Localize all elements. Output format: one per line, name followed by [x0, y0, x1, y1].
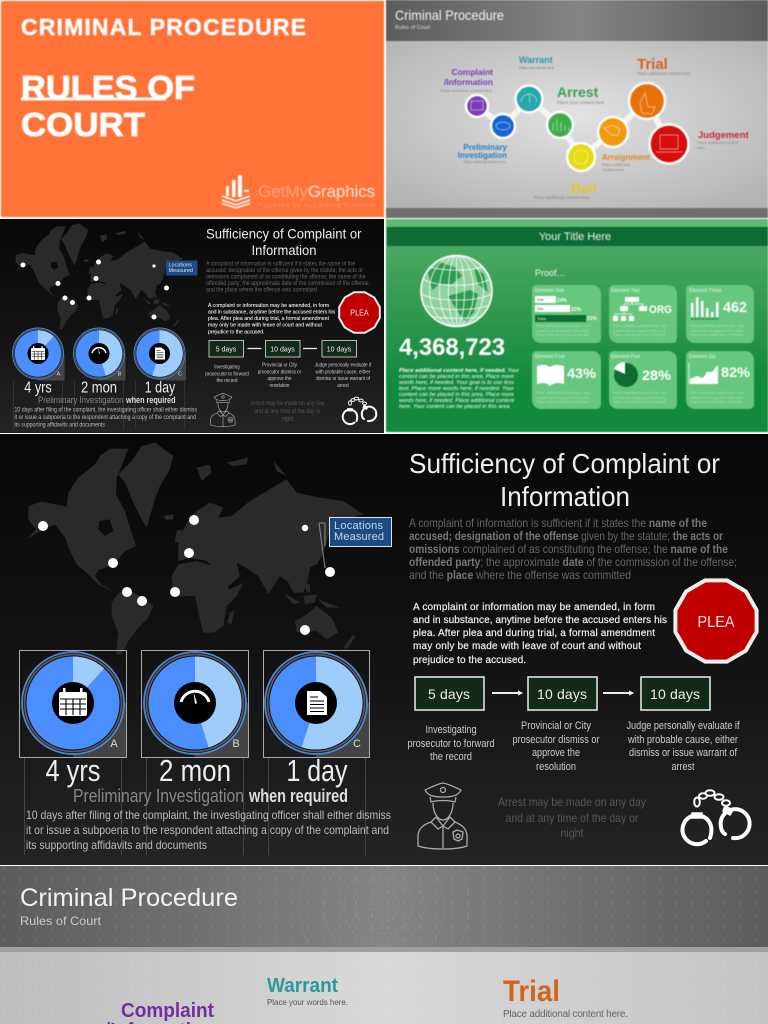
- card captions: Place additional content here. Your: [536, 324, 591, 328]
- label: warrant: [519, 55, 554, 70]
- thumbnail gray paragraph: A complaint of information is sufficient if it states the name of the: [206, 262, 356, 268]
- card: element six: [689, 354, 751, 384]
- subtitle: rules of court: Rules of Court: [20, 914, 102, 928]
- green paragraph: content can be placed in this area. Place more: [399, 392, 514, 398]
- thumbnail arrest note: and at any time of the day or: [254, 409, 321, 415]
- element cards backgrounds: [532, 285, 754, 409]
- label: bail: Place additional content here: [534, 195, 590, 200]
- card captions: content can be placed in this area.: [613, 396, 666, 400]
- callout: locations measured: Measured: [334, 531, 384, 543]
- card: element one: 22%: [571, 307, 582, 313]
- thumbnail captions: arrest: [337, 383, 349, 389]
- label: arrest: [557, 84, 605, 105]
- panel: sufficiency large: [0, 434, 768, 865]
- subheading: preliminary investigation: Preliminary Investigation: [73, 786, 244, 806]
- label: trial: [637, 56, 692, 76]
- thumbnail stats and text: when required: [125, 395, 176, 405]
- label: trial: Trial: [637, 56, 668, 73]
- note: arrest timing: Arrest may be made on any day: [498, 795, 646, 809]
- note: arrest timing: night: [560, 826, 584, 840]
- thumbnail captions: approve the: [268, 376, 292, 382]
- heading: sufficiency of complaint: Sufficiency of Complaint or: [409, 448, 720, 479]
- paragraph: sufficiency requirements: offended party; the approximate date of the commission of the offense;: [409, 555, 737, 569]
- timeline captions: arrest: [672, 761, 694, 773]
- card: element one: [535, 288, 598, 322]
- label: arraignment: Arraignment: [602, 153, 650, 162]
- callout: locations measured: [319, 518, 392, 568]
- thumbnail timeline: [209, 340, 356, 357]
- donut C: 1 day: [264, 650, 370, 758]
- timeline captions: prosecutor to forward: [408, 738, 494, 750]
- thumbnail stats and text: it or issue a subpoena to the respondent attaching a copy of the complaint and: [14, 415, 196, 421]
- timeline captions: approve the: [532, 747, 580, 759]
- city silhouette: [387, 396, 768, 432]
- card captions: Place more words here, if needed.: [536, 333, 589, 337]
- panel: orange cover: [1, 1, 384, 217]
- thumbnail handcuffs icon: [343, 397, 376, 424]
- logo: GetMyGraphics: GetMy: [258, 182, 308, 201]
- icon: handcuffs: [682, 790, 750, 844]
- card: element four: 43%: [567, 365, 597, 381]
- card captions: Place more words here, if needed.: [613, 333, 666, 337]
- thumbnail captions: [205, 362, 372, 389]
- thumbnail amendment paragraph: and in substance, anytime before the accused enters his: [208, 310, 336, 316]
- card: element one: 31%: [587, 316, 598, 322]
- thumbnail arrest note: [250, 401, 324, 422]
- thumbnail plea sign: [339, 292, 380, 333]
- timeline boxes: [415, 677, 710, 710]
- timeline captions: Investigating: [426, 724, 476, 736]
- paragraph: amendment: [413, 602, 667, 666]
- paragraph: sufficiency requirements: and the place where the offense was committed: [409, 568, 631, 582]
- heading: rules of court: COURT: [21, 106, 145, 143]
- label: judgement: Judgement: [698, 130, 750, 141]
- label: complaint information: /Information: [444, 77, 493, 87]
- timeline captions: [408, 720, 740, 773]
- thumbnail heading: [206, 226, 362, 258]
- card: element one: Two: [537, 307, 543, 311]
- paragraph: preliminary investigation: it or issue a subpoena to the respondent attaching a copy of the complaint and: [26, 823, 389, 837]
- label: arrest: Place your content here: [557, 100, 605, 105]
- icon: plea stop sign: [675, 580, 757, 662]
- thumbnail heading: Information: [252, 242, 316, 258]
- heading: rules of court: RULES OF: [21, 69, 195, 106]
- label: preliminary investigation: Place additional content here: [463, 160, 506, 164]
- timeline captions: the record: [430, 751, 472, 763]
- paragraph: sufficiency requirements: omissions complained of as constituting the offense; the name of the: [409, 542, 728, 556]
- card: element two: [611, 288, 672, 321]
- label: complaint information: Complaint: [121, 1000, 214, 1022]
- note: arrest timing: [498, 795, 646, 840]
- card: element six: 82%: [721, 364, 751, 380]
- green paragraph: content can be placed in this area. Place more: [399, 374, 514, 380]
- thumbnail world map: [15, 223, 183, 329]
- thumbnail gray paragraph: and the place where the offense was committed: [206, 288, 317, 294]
- thumbnail amendment paragraph: prejudice to the accused.: [208, 330, 264, 336]
- thumbnail amendment paragraph: may only be made with leave of court and without: [208, 322, 323, 328]
- timeline captions: resolution: [536, 761, 576, 773]
- card: element five: 28%: [642, 367, 672, 383]
- card captions: content can be placed in this area.: [536, 396, 589, 400]
- heading: rules of court: [21, 69, 195, 143]
- panel: criminal procedure large (cropped): [0, 866, 768, 1024]
- thumbnail timeline: 10 days: [327, 346, 352, 354]
- subheading: preliminary investigation: when required: [248, 786, 348, 806]
- panel: criminal procedure thumbnail: [386, 0, 768, 218]
- thumbnail captions: with probable cause, either: [315, 370, 371, 376]
- thumbnail arrest note: night: [282, 416, 294, 422]
- card: element three: Element Three: [689, 288, 722, 294]
- label: bail: [534, 180, 597, 200]
- callout: locations measured: Locations: [334, 520, 384, 532]
- thumbnail stats and text: C: [178, 372, 182, 378]
- stat values: 4 yrs: [46, 753, 100, 788]
- label: bail: Bail: [571, 180, 597, 196]
- card captions: Place more words here, if needed.: [536, 400, 589, 404]
- subtitle: rules of court: Rules of Court: [395, 25, 431, 31]
- label: preliminary investigation: Investigation: [458, 151, 507, 160]
- card captions: content can be placed in this area.: [690, 329, 743, 333]
- paragraph: amendment: prejudice to the accused.: [413, 655, 526, 666]
- heading: sufficiency of complaint: [409, 448, 720, 512]
- stat values: [46, 753, 348, 788]
- label: trial: Trial: [503, 975, 560, 1008]
- timeline captions: Judge personally evaluate if: [626, 720, 740, 732]
- stat values: 2 mon: [159, 753, 231, 788]
- card: element one: Three: [537, 317, 546, 321]
- label: judgement: Place additional content: [697, 140, 739, 145]
- thumbnail captions: resolution: [270, 383, 290, 389]
- thumbnail stats and text: Preliminary Investigation: [38, 395, 124, 405]
- card captions: content can be placed in this area.: [690, 396, 743, 400]
- label: complaint information: Place additional content here: [440, 88, 493, 93]
- label: judgement: [697, 130, 750, 150]
- card: element three: 462: [723, 299, 747, 316]
- card captions: Place additional content here. Your: [613, 324, 668, 328]
- thumbnail stats and text: 2 mon: [81, 380, 117, 396]
- heading: sufficiency of complaint: Information: [500, 481, 630, 512]
- paragraph: sufficiency requirements: [409, 516, 737, 582]
- label: warrant: Warrant: [267, 975, 338, 997]
- card captions: Place more words here, if needed.: [613, 400, 666, 404]
- card captions: Place additional content here. Your: [690, 324, 745, 328]
- icon: plea stop sign: PLEA: [698, 614, 735, 631]
- paragraph: amendment: and in substance, anytime before the accused enters his: [413, 615, 667, 626]
- green paragraph: here. Your content can be placed in this area.: [399, 404, 511, 410]
- thumbnail stats and text: B: [118, 372, 122, 378]
- thumbnail captions: Judge personally evaluate if: [315, 362, 372, 368]
- panel: sufficiency thumbnail: [0, 219, 384, 433]
- thumbnail amendment paragraph: [208, 303, 336, 336]
- heading: criminal procedure: CRIMINAL PROCEDURE: [21, 14, 306, 40]
- card: element four: [535, 354, 597, 386]
- thumbnail captions: Investigating: [214, 364, 240, 370]
- stat values: 1 day: [286, 753, 348, 788]
- card captions: content can be placed in this area.: [536, 329, 589, 333]
- thumbnail stats and text: A: [57, 372, 61, 378]
- paragraph: amendment: A complaint or information may be amended, in form: [413, 602, 655, 613]
- donut A: 4 yrs: [20, 650, 126, 758]
- thumbnail captions: prosecutor to forward: [205, 372, 249, 378]
- donut A: 4 yrs: A: [110, 738, 118, 750]
- donut B: 2 mon: B: [232, 738, 240, 750]
- card: element three: [689, 288, 747, 319]
- green paragraph: words here, if needed. Your goal is to use less: [399, 380, 515, 386]
- timeline boxes: 10 days: [537, 686, 587, 702]
- card: element four: Element Four: [535, 354, 565, 360]
- arrows between timeline boxes: [492, 692, 632, 694]
- paragraph: sufficiency requirements: A complaint of information is sufficient if it states the name of the: [409, 516, 707, 530]
- green paragraph: [399, 368, 519, 410]
- thumbnail stats and text: [14, 372, 197, 428]
- card captions: Place additional content here. Your: [690, 391, 745, 395]
- card captions: Place more words here, if needed.: [690, 400, 743, 404]
- thumbnail timeline: 5 days: [216, 346, 237, 354]
- label: arraignment: Place additional: [602, 162, 630, 167]
- timeline captions: prosecutor dismiss or: [512, 734, 600, 746]
- paragraph: amendment: may only be made with leave of court and without: [413, 641, 641, 652]
- proof heading: Proof…: [535, 268, 566, 278]
- paragraph: preliminary investigation: 10 days after filing of the complaint, the investigating officer shall either dismiss: [26, 808, 391, 822]
- card: element two: ORG: [649, 304, 672, 316]
- timeline boxes: 5 days: [428, 686, 470, 702]
- title: criminal procedure: Criminal Procedure: [20, 884, 238, 912]
- location dots: [38, 515, 335, 635]
- title bar text: Your Title Here: [539, 231, 611, 243]
- label: trial: Place additional content here: [637, 71, 692, 76]
- big number: 4,368,723: [399, 334, 505, 361]
- thumbnail captions: the record: [216, 378, 238, 384]
- thumbnail gray paragraph: accused; designation of the offense given by the statute; the acts or: [206, 268, 363, 274]
- thumbnail plea sign: PLEA: [350, 308, 369, 318]
- card: element one: 14%: [557, 298, 568, 304]
- label: warrant: Place your words here: [519, 66, 554, 70]
- label: preliminary investigation: Preliminary: [463, 143, 508, 152]
- card captions: Place more words here, if needed.: [690, 333, 743, 337]
- title: criminal procedure: Criminal Procedure: [395, 7, 504, 23]
- thumbnail locations callout: Measured: [168, 268, 193, 274]
- label: warrant: [267, 978, 348, 1006]
- timeline captions: dismiss or issue warrant of: [629, 747, 738, 759]
- thumbnail arrest note: Arrest may be made on any day: [250, 401, 324, 407]
- green paragraph: words here, if needed. Place additional content: [399, 398, 515, 404]
- green paragraph: text. Place more words here, if needed. Your: [399, 386, 514, 392]
- card captions: content can be placed in this area.: [613, 329, 666, 333]
- panel: green proof thumbnail: [386, 219, 768, 432]
- card: element one: One: [537, 298, 544, 302]
- green paragraph: Place additional content here, if needed. Your: [399, 368, 519, 374]
- thumbnail stats and text: its supporting affidavits and documents: [14, 422, 105, 428]
- label: complaint information: [440, 67, 493, 93]
- label: complaint information: Complaint: [451, 67, 493, 77]
- thumbnail locations callout: Locations: [168, 262, 192, 268]
- thumbnail stats and text: 1 day: [145, 380, 175, 396]
- note: arrest timing: and at any time of the day or: [506, 811, 639, 825]
- card: element five: Element Five: [611, 354, 640, 360]
- chain of process circles: [466, 83, 688, 171]
- timeline boxes: 10 days: [650, 686, 700, 702]
- thumbnail amendment paragraph: plea. After plea and during trial, a formal amendment: [208, 316, 330, 322]
- card captions: Place additional content here. Your: [536, 391, 591, 395]
- thumbnail police icon: [210, 394, 235, 426]
- label: arraignment: [602, 153, 650, 172]
- thumbnail timeline: 10 days: [270, 346, 295, 354]
- paragraph: preliminary investigation: [26, 808, 391, 852]
- timeline captions: with probable cause, either: [627, 734, 738, 746]
- card: element two: Element Two: [611, 288, 640, 294]
- logo: GetMyGraphics: Graphics: [308, 182, 375, 201]
- thumbnail captions: prosecutor dismiss or: [258, 370, 301, 376]
- thumbnail gray paragraph: omissions complained of as constituting the offense; the name of the: [206, 274, 366, 280]
- thumbnail captions: Provincial or City: [262, 362, 297, 368]
- paragraph: sufficiency requirements: accused; designation of the offense given by the statute; the acts or: [409, 529, 723, 543]
- paragraph: amendment: plea. After plea and during trial, a formal amendment: [413, 628, 655, 639]
- card: element six: Element Six: [689, 354, 716, 360]
- card: element five: [611, 354, 672, 387]
- label: warrant: Warrant: [519, 55, 553, 65]
- thumbnail stats and text: 4 yrs: [24, 380, 52, 396]
- label: preliminary investigation: [458, 143, 508, 164]
- label: trial: [503, 980, 628, 1017]
- thumbnail stats and text: 10 days after filing of the complaint, the investigating officer shall either dismiss: [14, 408, 197, 414]
- icon: police officer: [418, 783, 467, 849]
- logo: GetMyGraphics: Powered by eLearning Platform: [258, 202, 375, 209]
- thumbnail location dots: [20, 260, 169, 320]
- label: arrest: Arrest: [557, 84, 599, 100]
- thumbnail locations callout: [166, 260, 198, 276]
- timeline captions: Provincial or City: [521, 720, 591, 732]
- donut C: 1 day: C: [353, 738, 361, 750]
- card: element one: Element One: [535, 288, 564, 294]
- thumbnail gray paragraph: offended party; the approximate date of the commission of the offense;: [206, 281, 370, 287]
- thumbnail heading: Sufficiency of Complaint or: [206, 226, 362, 242]
- card captions: Place additional content here. Your: [613, 391, 668, 395]
- world map: [27, 443, 363, 654]
- label: warrant: Place your words here.: [267, 998, 348, 1007]
- paragraph: preliminary investigation: its supporting affidavits and documents: [26, 838, 207, 852]
- icon: globe: [420, 256, 493, 326]
- thumbnail captions: dismiss or issue warrant of: [316, 376, 370, 382]
- card captions: [536, 324, 745, 404]
- thumbnail amendment paragraph: A complaint or information may be amended, in form: [208, 303, 329, 309]
- thumbnail donuts: [12, 328, 186, 430]
- donut B: 2 mon: [142, 650, 248, 758]
- label: arraignment: content here.: [602, 167, 625, 172]
- label: judgement: here.: [697, 145, 706, 150]
- label: trial: Place additional content here.: [503, 1009, 628, 1020]
- logo: GetMyGraphics: [222, 175, 375, 209]
- thumbnail gray paragraph: [206, 262, 370, 294]
